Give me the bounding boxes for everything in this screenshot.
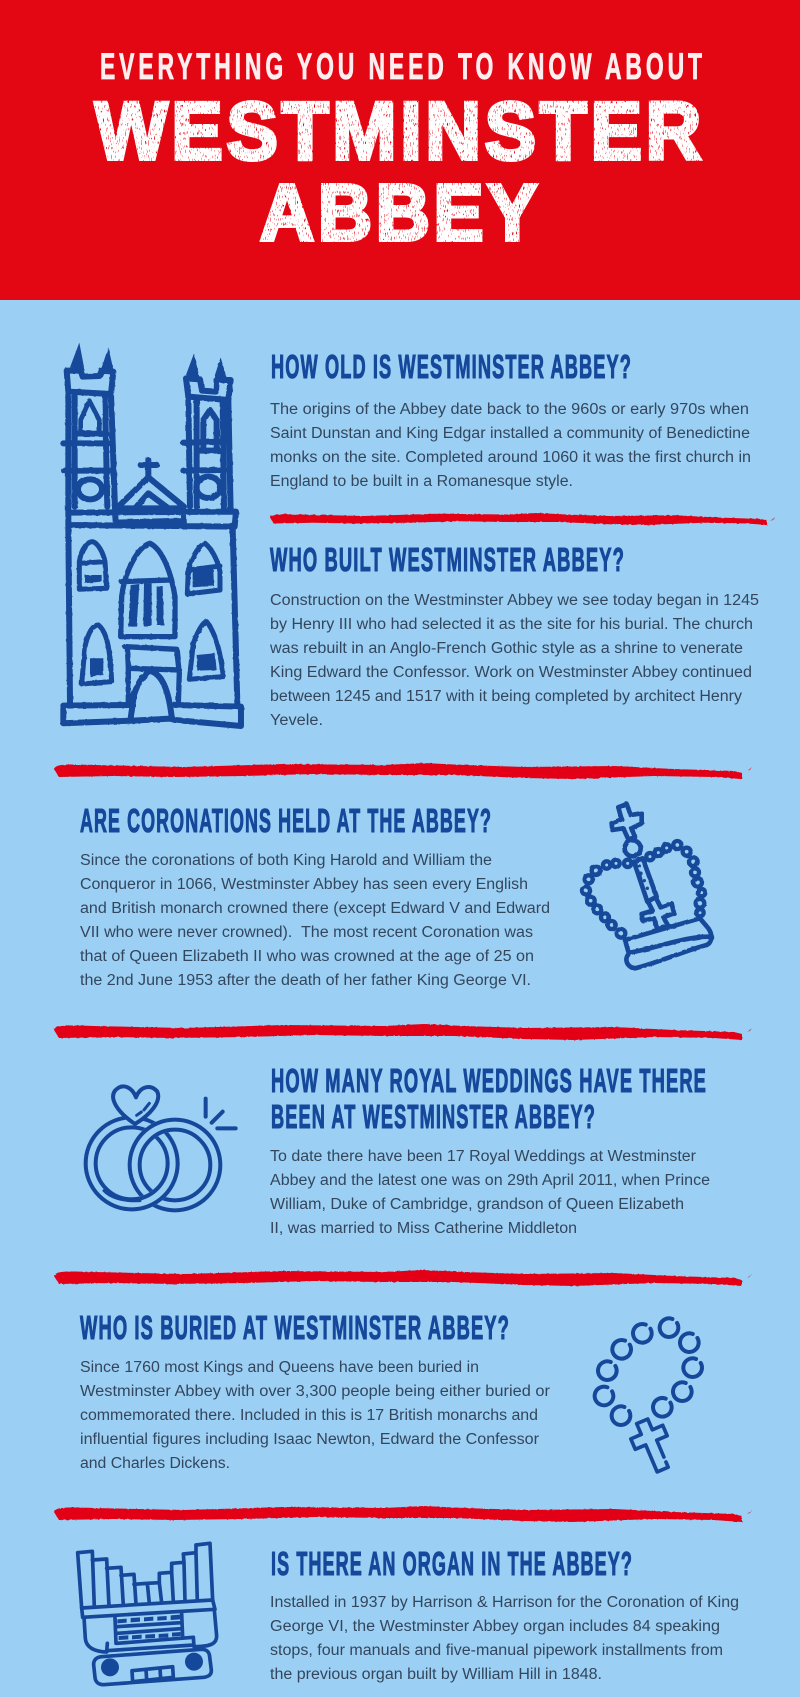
divider: brush stroke 2: [54, 1024, 752, 1040]
body text: between 1245 and 1517 with it being completed by architect Henry: [270, 688, 742, 705]
body text: [270, 401, 751, 490]
body text: [80, 852, 550, 989]
heading: [271, 1062, 707, 1135]
body text: William, Duke of Cambridge, grandson of Queen Elizabeth: [270, 1196, 684, 1213]
body text: VII who were never crowned). The most recent Coronation was: [80, 924, 533, 941]
body text: that of Queen Elizabeth II who was crowned at the age of 25 on: [80, 948, 534, 965]
panel: who is buried: [80, 1309, 550, 1472]
body text: The origins of the Abbey date back to the 960s or early 970s when: [270, 401, 749, 418]
panel: how old: [270, 348, 751, 490]
body text: Conqueror in 1066, Westminster Abbey has seen every English: [80, 876, 528, 893]
body text: monks on the site. Completed around 1060 it was the first church in: [270, 449, 751, 466]
body text: Since 1760 most Kings and Queens have been buried in: [80, 1359, 479, 1376]
body text: Abbey and the latest one was on 29th April 2011, when Prince: [270, 1172, 710, 1189]
body text: [269, 592, 759, 729]
body text: the 2nd June 1953 after the death of her father King George VI.: [80, 972, 531, 989]
body text: and Charles Dickens.: [80, 1455, 230, 1472]
panel: organ: [270, 1545, 739, 1683]
icon: crown: [582, 804, 711, 968]
icon: abbey building: [63, 343, 241, 726]
body text: Construction on the Westminster Abbey we see today began in 1245: [270, 592, 759, 609]
header banner: [0, 0, 800, 300]
body text: stops, four manuals and five-manual pipework installments from: [270, 1642, 723, 1659]
body text: commemorated there. Included in this is 17 British monarchs and: [80, 1407, 538, 1424]
body text: was rebuilt in an Anglo-French Gothic style as a shrine to venerate: [269, 640, 743, 657]
body text: To date there have been 17 Royal Weddings at Westminster: [270, 1148, 696, 1165]
body text: Saint Dunstan and King Edgar installed a community of Benedictine: [270, 425, 750, 442]
icon: wedding rings: [86, 1086, 236, 1210]
title: main heading: WESTMINSTER: [95, 86, 705, 177]
body text: Installed in 1937 by Harrison & Harrison for the Coronation of King: [270, 1594, 739, 1611]
divider: brush stroke 4: [54, 1506, 752, 1522]
divider: brush stroke 3: [54, 1270, 752, 1286]
body text: influential figures including Isaac Newton, Edward the Confessor: [80, 1431, 539, 1448]
body text: [80, 1359, 550, 1472]
panel: coronations: [80, 802, 550, 989]
body text: II, was married to Miss Catherine Middleton: [270, 1220, 577, 1237]
title: main heading: [95, 86, 705, 257]
body text: [270, 1594, 739, 1683]
icon: rosary: [591, 1315, 705, 1476]
panel: who built: [269, 541, 759, 729]
body text: Yevele.: [270, 712, 323, 729]
body text: King Edward the Confessor. Work on Westminster Abbey continued: [270, 664, 752, 681]
panel: royal weddings: [270, 1062, 710, 1237]
body text: Since the coronations of both King Harold and William the: [80, 852, 492, 869]
title: eyebrow line: EVERYTHING YOU NEED TO KNOW ABOUT: [100, 45, 702, 87]
body text: England to be built in a Romanesque style.: [270, 473, 573, 490]
divider: brush stroke 1: [54, 763, 752, 779]
body text: by Henry III who had selected it as the site for his burial. The church: [270, 616, 753, 633]
icon: pipe organ: [78, 1543, 217, 1685]
body text: the previous organ built by William Hill in 1848.: [270, 1666, 602, 1683]
title: main heading: ABBEY: [260, 168, 541, 257]
divider: short brush stroke: [270, 513, 775, 525]
body text: and British monarch crowned there (except Edward V and Edward: [80, 900, 550, 917]
body text: [270, 1148, 710, 1237]
body text: George VI, the Westminster Abbey organ includes 84 speaking: [270, 1618, 720, 1635]
body text: Westminster Abbey with over 3,300 people being either buried or: [80, 1383, 550, 1400]
